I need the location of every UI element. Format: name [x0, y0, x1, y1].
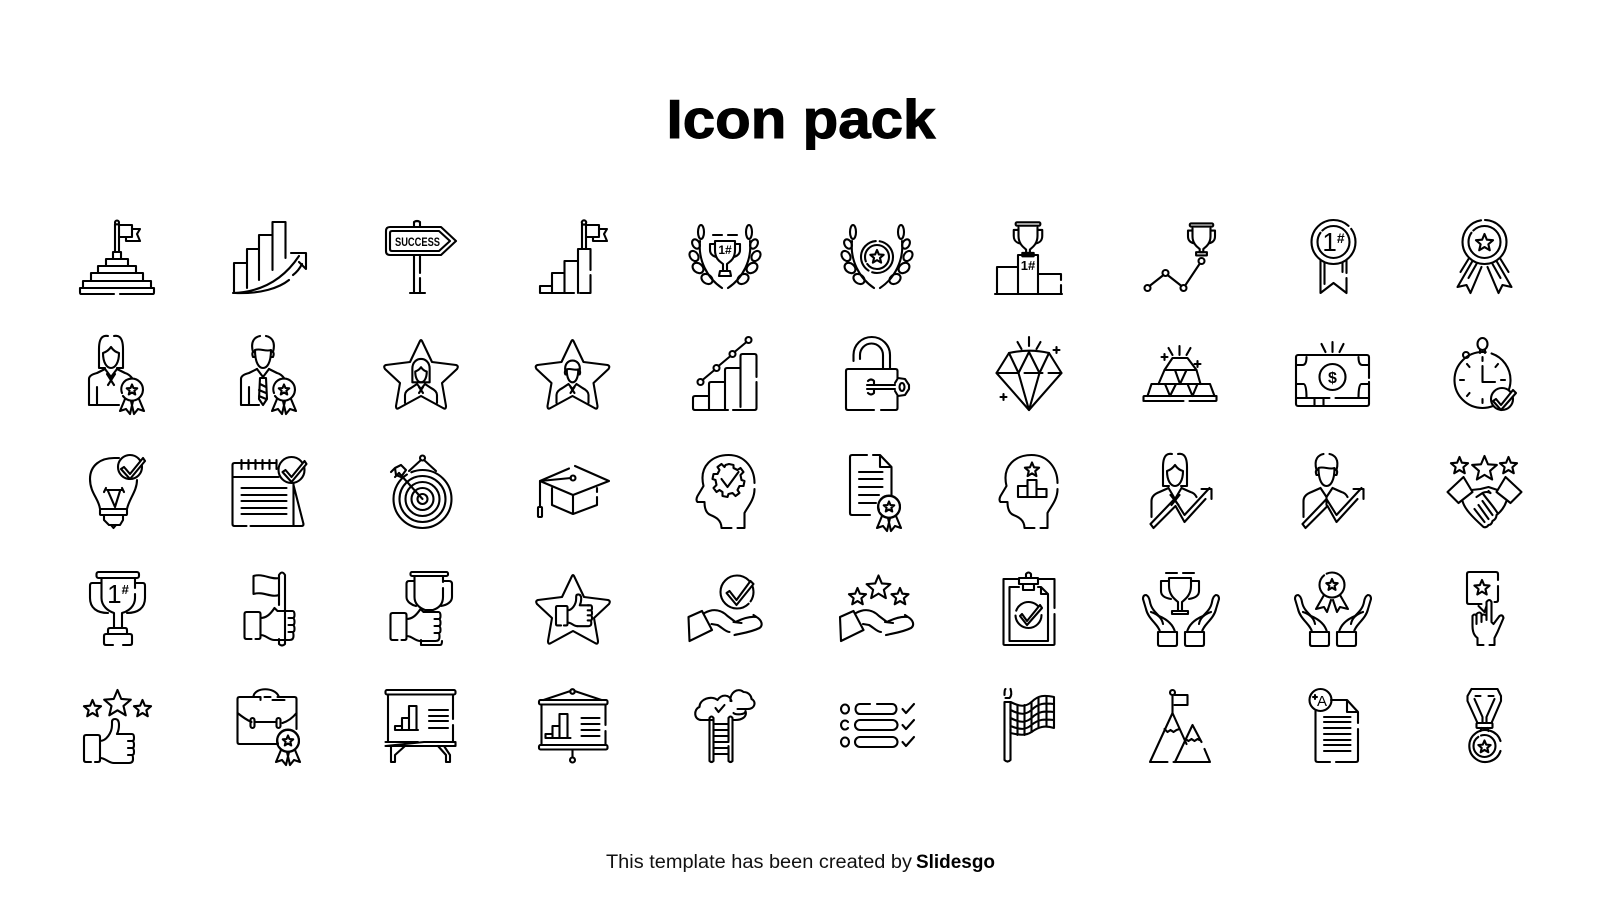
icon: stopwatch with check: [1454, 338, 1516, 410]
icon: star with woman: [384, 340, 458, 409]
icon: open padlock with key: [846, 337, 909, 410]
icon: ladder to cloud: [695, 690, 755, 762]
icon: rosette number one: 1: [1322, 227, 1337, 257]
icon: star with man: [536, 340, 609, 409]
icon: trophy number one: 1: [107, 579, 122, 609]
icon: podium with trophy: [995, 222, 1062, 294]
icon: laurel wreath with star badge: [840, 225, 914, 288]
icon: graded document: [1310, 689, 1358, 762]
icon: hand holding flag: [244, 572, 294, 646]
icon: trophy number one: [90, 572, 145, 645]
icon: man with award: [241, 336, 296, 414]
icon: line graph with trophy: [1144, 223, 1215, 291]
icon: medal on ribbon: [1468, 689, 1501, 762]
icon: certificate document: [850, 455, 901, 531]
icon: target with arrow: [391, 456, 452, 528]
icon: presentation board on legs: [386, 690, 456, 762]
icon: hand pointing at star card: [1467, 572, 1504, 645]
icon: checkered flag: [1004, 689, 1054, 762]
icon: open hand with stars: [840, 576, 913, 641]
icon: head with gear and check: [696, 455, 754, 528]
icon: rising bars with arrow: [233, 222, 306, 293]
icon: clipboard with check: [1004, 572, 1054, 645]
icon: gold bars: [1144, 346, 1216, 401]
icon: notepad with check: [232, 457, 306, 526]
icon: checklist: [841, 704, 914, 747]
icon: success signpost: SUCCESS: [395, 235, 440, 249]
icon: projector screen: [539, 689, 608, 762]
icon: banknote: $: [1328, 370, 1337, 387]
icon: three stars with thumbs up: [84, 690, 151, 763]
icon: man with growth arrow: [1302, 454, 1364, 528]
icon: handshake with three stars: [1448, 456, 1522, 527]
icon: banknote: [1296, 342, 1369, 406]
icon: light bulb with check: [90, 455, 145, 528]
icon: hands holding trophy: [1143, 573, 1219, 646]
icon: rosette number one: #: [1337, 230, 1345, 246]
icon: success signpost: [386, 221, 456, 293]
icon: laurel wreath with trophy: 1#: [718, 243, 732, 257]
icon: graded document: A: [1317, 693, 1327, 710]
icon: flag on stepped pyramid: [80, 220, 154, 294]
icon: hands holding medal: [1295, 572, 1371, 646]
icon: open hand with check: [688, 576, 762, 641]
icon: laurel wreath with trophy: [688, 225, 762, 288]
icon: mountains with flag: [1150, 690, 1210, 762]
icon: hand holding trophy: [390, 572, 452, 645]
icon: step bars with flag: [540, 220, 607, 293]
title: Icon pack: [666, 88, 936, 150]
icon: trophy number one: #: [122, 582, 130, 597]
footer credit: Slidesgo: [916, 852, 995, 873]
icon: rosette star with ribbons: [1458, 220, 1512, 293]
icon: head with star and podium: [1000, 455, 1058, 528]
icon: star with thumbs up: [536, 575, 610, 644]
icon: sparkling diamond: [996, 337, 1062, 410]
icon: woman with growth arrow: [1150, 454, 1212, 528]
icon: growth bars with trend line: [693, 337, 756, 410]
icon: podium with trophy: 1#: [1021, 258, 1036, 273]
icon: woman with award: [89, 336, 144, 414]
icon: graduation cap: [538, 466, 609, 517]
icon: rosette number one: [1312, 220, 1356, 293]
footer credit: This template has been created by: [606, 852, 913, 873]
icon: briefcase with award: [238, 689, 300, 765]
